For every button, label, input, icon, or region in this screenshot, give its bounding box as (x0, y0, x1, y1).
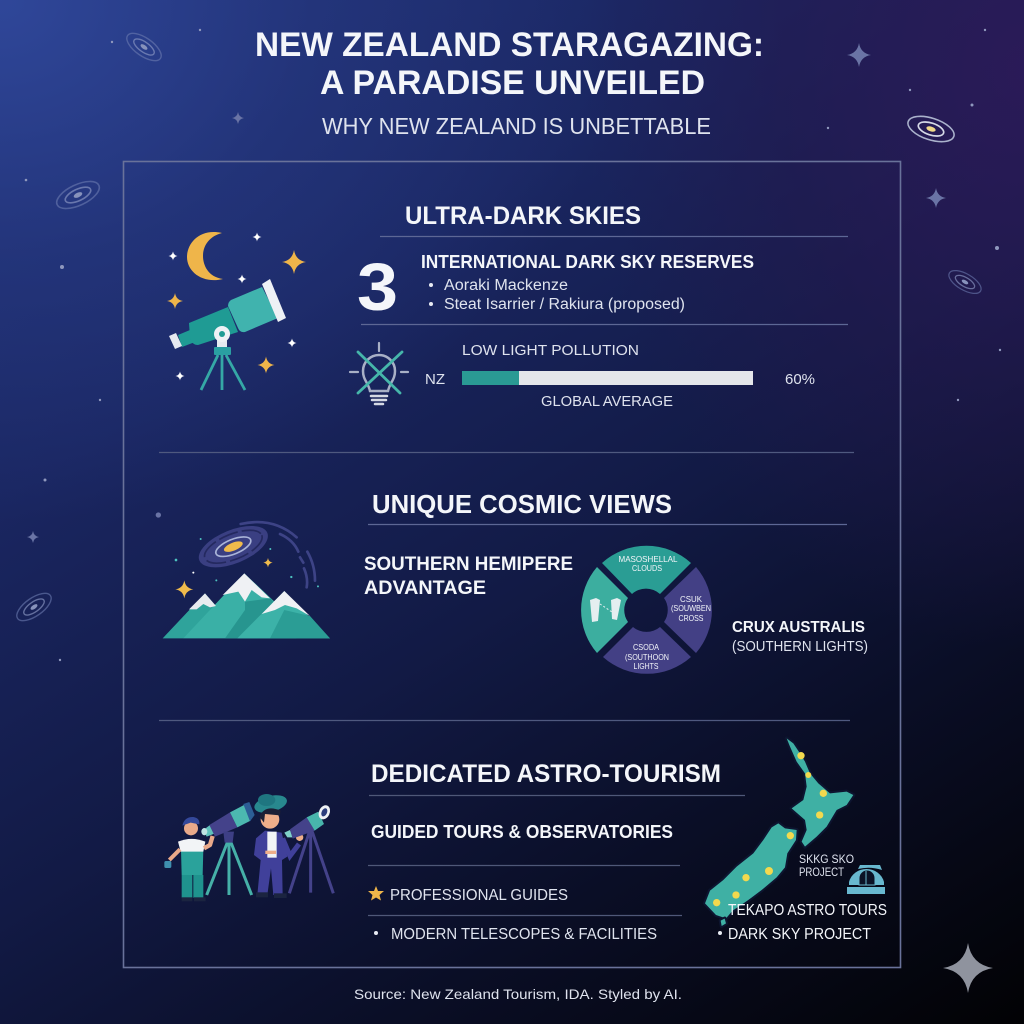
icon: two stargazers with telescopes (164, 792, 333, 901)
heading: ultra-dark skies: ULTRA-DARK SKIES (405, 202, 641, 230)
main frame (124, 162, 900, 968)
title: A PARADISE UNVEILED (320, 64, 705, 102)
chart: light pollution bar (425, 342, 815, 410)
label: project tag: SKKG SKO (799, 854, 854, 866)
chart: light pollution bar: 60% (785, 371, 815, 388)
subtitle: WHY NEW ZEALAND IS UNBETTABLE (322, 113, 711, 139)
heading: unique cosmic views: UNIQUE COSMIC VIEWS (372, 489, 672, 519)
chart: four-segment donut: CSODA (633, 642, 659, 652)
feature: professional guides: PROFESSIONAL GUIDES (390, 887, 568, 904)
chart: four-segment donut: CLOUDS (632, 563, 662, 573)
icon: telescope with moon and stars (167, 232, 306, 390)
icon: crossed-out light bulb (350, 343, 408, 404)
label: southern hemisphere advantage: ADVANTAGE (364, 578, 486, 599)
reserves list: Steat Isarrier / Rakiura (proposed) (444, 296, 685, 313)
chart: four-segment donut: CSUK (680, 594, 702, 604)
chart: light pollution bar: NZ (425, 371, 445, 388)
label: crux australis: CRUX AUSTRALIS (732, 619, 865, 636)
chart: four-segment donut: MASOSHELLAL (618, 554, 678, 564)
label: crux australis: (SOUTHERN LIGHTS) (732, 638, 868, 655)
reserves list (421, 252, 754, 313)
chart: four-segment donut: LIGHTS (634, 661, 659, 671)
chart: four-segment donut: (SOUWBEN (671, 603, 711, 613)
chart: light pollution bar: GLOBAL AVERAGE (541, 393, 673, 410)
label: tour operators: TEKAPO ASTRO TOURS (728, 902, 887, 919)
heading: dedicated astro-tourism: DEDICATED ASTRO-TOURISM (371, 760, 721, 788)
label: southern hemisphere advantage: SOUTHERN HEMIPERE (364, 554, 573, 575)
reserves list: INTERNATIONAL DARK SKY RESERVES (421, 252, 754, 272)
panel: dedicated astro-tourism (164, 738, 887, 943)
label: project tag (799, 854, 854, 879)
feature: modern telescopes: MODERN TELESCOPES & FACILITIES (391, 926, 657, 943)
title (255, 26, 764, 102)
chart: light pollution bar: LOW LIGHT POLLUTION (462, 342, 639, 359)
map: New Zealand with dark sky sites (705, 738, 853, 926)
label: project tag: PROJECT (799, 867, 844, 879)
source line: Source: New Zealand Tourism, IDA. Styled by AI. (354, 986, 682, 1002)
chart: four-segment donut: (SOUTHOON (625, 652, 669, 662)
subheading: guided tours: GUIDED TOURS & OBSERVATORIES (371, 822, 673, 842)
big number 3: 3 (357, 250, 398, 325)
chart: four-segment donut: CROSS (678, 613, 704, 623)
chart: four-segment donut (581, 546, 712, 674)
label: southern hemisphere advantage (364, 554, 573, 599)
background decoration: galaxies and stars (12, 28, 1001, 661)
icon: observatory dome (847, 865, 885, 894)
panel: ultra-dark skies (167, 202, 848, 410)
label: tour operators: DARK SKY PROJECT (728, 926, 871, 943)
title: NEW ZEALAND STARAGAZING: (255, 26, 764, 64)
reserves list: Aoraki Mackenze (444, 277, 568, 294)
corner sparkle (943, 943, 993, 993)
panel: unique cosmic views (156, 489, 868, 674)
label: crux australis (732, 619, 868, 655)
icon: galaxy over mountains (156, 512, 330, 638)
label: tour operators (718, 902, 887, 943)
